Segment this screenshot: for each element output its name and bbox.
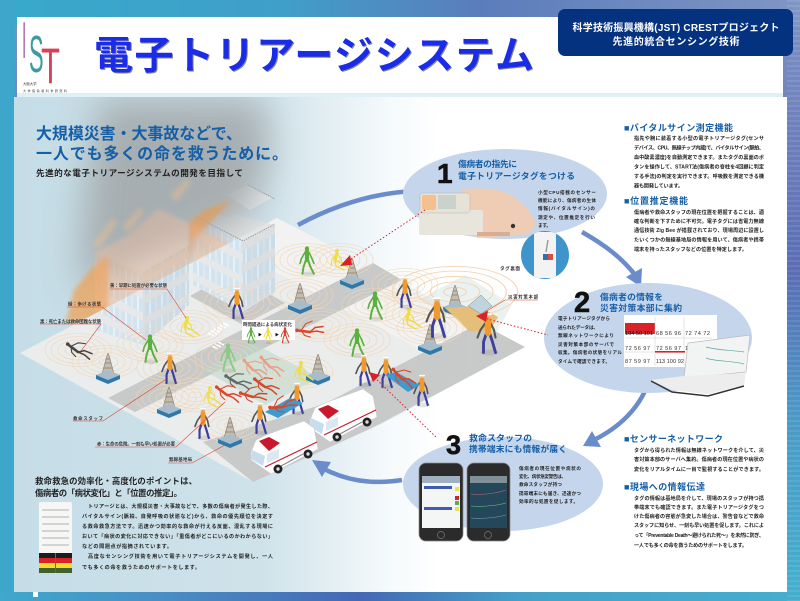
project badge: 先進的統合センシング技術 xyxy=(612,35,740,48)
callout text: 黒：死亡または救命困難な状態 xyxy=(40,318,102,325)
text: sensor network: 変化をリアルタイムに一目で監視することができます。 xyxy=(634,466,764,473)
text: position estimation: 通信技術 Zig Bee が搭載されており、現場周辺に設置し xyxy=(634,227,764,234)
triage change label: 時間経過による病状変化 xyxy=(243,321,293,328)
step 3 bubble: 変化、病状急変警告は、 xyxy=(519,473,566,480)
radio rings xyxy=(45,244,463,442)
flow arrows xyxy=(298,183,645,482)
step 1 text: 小型CPU搭載のセンサー xyxy=(538,189,596,196)
text: field information: けた傷病者の容態が急変した場合は、警告音などで救命 xyxy=(634,513,765,520)
step 2 bubble: タイムで確認できます。 xyxy=(558,358,610,365)
project badge: 科学技術振興機構(JST) CRESTプロジェクト xyxy=(572,21,780,34)
callout text: 災害対策本部 xyxy=(508,294,539,300)
text: field information: 帯端末でも確認できます。また電子トリアージタグをつ xyxy=(634,504,764,511)
explanation text: でも多くの命を救うためのサポートをします。 xyxy=(82,564,200,571)
headquarters tent xyxy=(392,266,518,368)
text: field information xyxy=(624,481,765,549)
text: field information: ■現場への情報伝達 xyxy=(624,481,705,492)
text: vital sign function: ■バイタルサイン測定機能 xyxy=(624,122,733,133)
explanation text: る救命救急方法です。迅速かつ効率的な救命が行える反面、混乱する現場に xyxy=(82,523,273,530)
red dotted connectors xyxy=(340,210,548,438)
triage change label: ▶ xyxy=(275,332,279,337)
callout text: 黄：早期に処置が必要な状態 xyxy=(110,282,168,289)
text: position estimation: ■位置推定機能 xyxy=(624,195,688,206)
headline: 一人でも多くの命を救うために。 xyxy=(36,145,288,163)
step 2 heading: 傷病者の情報を xyxy=(600,291,663,302)
step 1 bubble: 機能により、傷病者の生体 xyxy=(538,197,596,204)
explanation text: などの問題点が指摘されています。 xyxy=(82,543,172,550)
step 3 text: 傷病者の現在位置や病状の xyxy=(519,465,581,472)
tag back label: タグ裏面 xyxy=(500,265,520,272)
monitor readings chart: 68 56 96 xyxy=(656,331,681,337)
step 2 text: 電子トリアージタグから xyxy=(558,315,610,322)
step 2 bubble: 無線ネットワークにより xyxy=(558,332,614,339)
step 3 bubble: 携帯端末にも届き、迅速かつ xyxy=(519,490,581,497)
step 1 bubble xyxy=(403,149,607,279)
monitor readings chart: 104 50 101 xyxy=(625,331,653,337)
stretchers xyxy=(265,364,420,418)
callout text: 赤：生命の危険。一刻も早い処置が必要 xyxy=(97,440,176,448)
text: position estimation: たいくつかの無線基地局の情報を用いて、傷病者や携帯 xyxy=(634,236,764,244)
step 2 bubble: 災害対策本部のサーバで xyxy=(558,341,614,348)
text: vital sign function xyxy=(624,122,765,190)
text: field information: タグの情報は基地局を介して、現場のスタッフが持つ携 xyxy=(634,495,764,502)
logo: 大学院情報科学研究科 xyxy=(23,88,67,93)
low building xyxy=(95,209,189,345)
small white marker xyxy=(33,592,38,597)
text: vital sign function: する手法)の判定を実行できます。呼吸数を測定できる機 xyxy=(634,173,765,180)
step 1 bubble: 情報(バイタルサイン)の xyxy=(538,205,595,212)
scene: disaster site xyxy=(20,100,539,482)
green tent over triage area xyxy=(203,343,320,405)
injured figures xyxy=(63,246,421,407)
callout text xyxy=(40,282,539,463)
explanation text: 高度なセンシング技術を用いて電子トリアージシステムを開発し、一人 xyxy=(88,553,273,560)
tall building xyxy=(193,175,275,312)
callout text: 無線基地局 xyxy=(169,456,193,463)
bottom-left explanation xyxy=(35,476,273,573)
number 1: 1 xyxy=(437,158,453,189)
monitor readings chart: 14 xyxy=(685,346,693,352)
explanation text: バイタルサイン(脈拍、自発呼吸の状態など)から、救命の優先順位を決定す xyxy=(82,513,273,520)
explanation text: トリアージとは、大規模災害・大事故などで、多数の傷病者が発生した際、 xyxy=(88,503,273,510)
radio towers xyxy=(96,258,442,448)
logo: I xyxy=(22,12,26,70)
bottom-left explanation: 救命救急の効率化・高度化のポイントは、 xyxy=(35,476,197,486)
text: position estimation: 端末を持ったスタッフなどの位置を特定します。 xyxy=(634,246,747,253)
text: vital sign function: 指先や腕に装着する小型の電子トリアージタグ(センサ xyxy=(634,135,764,142)
text: position estimation xyxy=(624,195,765,253)
title: 電子トリアージシステム xyxy=(94,35,534,78)
step 3 bubble: 効率的な処置を促します。 xyxy=(519,498,578,505)
ground xyxy=(20,218,525,482)
text: field information: スタッフに知らせ、一刻も早い処置を促します。これによ xyxy=(634,522,764,529)
step 3 heading: 救命スタッフの xyxy=(469,432,532,443)
text: vital sign function: 器も開発しています。 xyxy=(634,182,683,190)
ambulances xyxy=(251,389,377,474)
bottom-left explanation: 傷病者の「病状変化」と「位置の推定」。 xyxy=(35,488,182,498)
step 1 heading: 傷病者の指先に xyxy=(458,158,517,169)
logo: T xyxy=(41,37,60,94)
title bar xyxy=(17,9,793,98)
text: sensor network: タグから得られた情報は無線ネットワークを介して、災 xyxy=(634,447,764,454)
text: position estimation: 確な判断を下すために不可欠。電子タグには省電力無線 xyxy=(634,218,765,225)
text: sensor network xyxy=(624,434,764,473)
step 3 bubble: 救命スタッフが持つ xyxy=(519,481,562,488)
text: field information: って「Preventable Death～避けられた死～」を未然に防ぎ、 xyxy=(634,532,764,539)
rescue staff xyxy=(162,277,498,440)
triage tag xyxy=(39,502,72,573)
text: position estimation: 傷病者や救命スタッフの現在位置を把握することは、適 xyxy=(634,209,764,216)
step 3 bubble: 携帯端末にも情報が届く xyxy=(469,443,567,454)
phone: vital signs graph xyxy=(467,463,510,541)
number 3: 3 xyxy=(446,430,461,460)
main panel xyxy=(14,97,787,592)
step 1 bubble: 測定や、位置推定を行い xyxy=(538,214,595,221)
callout labels xyxy=(40,289,538,463)
step 3 bubble xyxy=(403,430,603,541)
text: sensor network: 害対策本部のサーバへ集約。傷病者の現在位置や病状の xyxy=(634,456,764,463)
headline: 大規模災害・大事故などで、 xyxy=(36,124,242,143)
number 2: 2 xyxy=(574,287,590,319)
callout text: 緑：歩ける状態 xyxy=(68,300,102,308)
headline xyxy=(36,124,288,178)
step 2 bubble: 送られたデータは、 xyxy=(558,324,598,331)
monitor readings chart: 87 59 97 xyxy=(625,359,650,365)
text: vital sign function: タンを操作して、START法(傷病者の脊柱を4回顧に判定 xyxy=(634,164,764,170)
project badge xyxy=(558,9,793,56)
text: sensor network: ■センサーネットワーク xyxy=(624,434,723,444)
monitor readings chart: 72 74 72 xyxy=(685,331,710,337)
text: vital sign function: 血中酸素濃度)を自動測定できます。またタグの裏面のボ xyxy=(634,154,764,161)
text: vital sign function: デバイス、CPU、無線チップ内蔵)で、バイタルサイン(脈拍、 xyxy=(634,144,764,152)
roads xyxy=(108,263,525,482)
zebra crossings xyxy=(208,323,229,349)
step 1 bubble: ます。 xyxy=(538,222,551,229)
icon: tag on fingertip xyxy=(419,188,535,238)
text: field information: 一人でも多くの命を救うためのサポートをします。 xyxy=(634,542,747,549)
smoke and flames xyxy=(66,100,268,340)
step 2 bubble: 災害対策本部に集約 xyxy=(600,302,682,313)
tag back circle xyxy=(521,231,569,279)
callout text: 救命スタッフ xyxy=(73,415,103,422)
monitor readings chart: 113 100 92 xyxy=(656,359,684,365)
triage change label xyxy=(242,320,295,344)
step 2 bubble: 収集。傷病者の状態をリアル xyxy=(558,349,622,356)
logo xyxy=(22,12,67,94)
monitor readings chart xyxy=(624,315,717,367)
logo: S xyxy=(29,26,44,84)
monitor readings chart: 72 56 97 xyxy=(625,346,650,352)
explanation text xyxy=(82,503,273,571)
logo: 大阪大学 xyxy=(23,81,37,86)
step 1 bubble: 電子トリアージタグをつける xyxy=(458,170,575,181)
laptop xyxy=(651,335,750,396)
step 2 bubble xyxy=(544,283,752,396)
headline: 先進的な電子トリアージシステムの開発を目指して xyxy=(36,167,243,178)
monitor readings chart: 72 56 97 xyxy=(656,346,681,352)
explanation text: おいて「病状の変化に対応できない」「重傷者がどこにいるのかわからない」 xyxy=(82,533,273,540)
triage change label: ▶ xyxy=(258,332,262,337)
phone: patient list xyxy=(419,463,463,541)
